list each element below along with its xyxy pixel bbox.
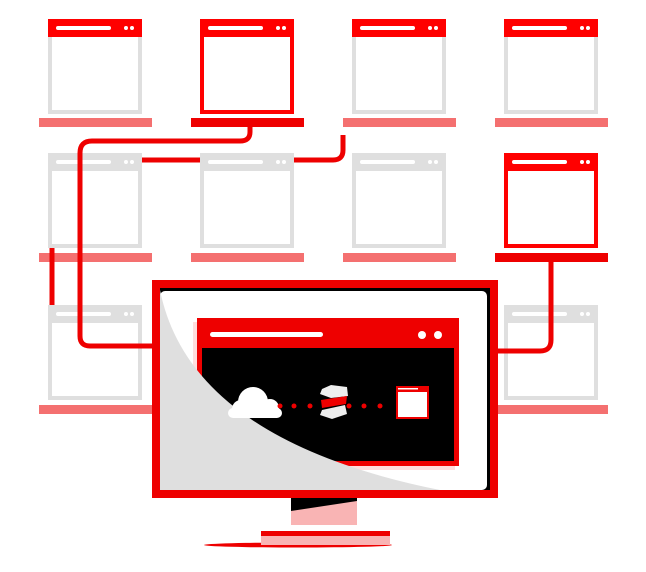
row 3 windows	[39, 305, 608, 414]
dotted connectors	[278, 404, 382, 408]
connector lines	[52, 127, 551, 351]
page curl	[160, 290, 440, 490]
row 1 windows	[39, 19, 608, 127]
icon: small window	[396, 386, 429, 419]
connector line behind row 2	[142, 135, 343, 160]
icon: stack	[320, 385, 348, 419]
monitor	[152, 280, 498, 498]
row 2 windows	[39, 153, 608, 262]
icon: cloud	[228, 387, 282, 418]
app window on screen	[193, 318, 459, 470]
monitor stand	[204, 498, 392, 548]
